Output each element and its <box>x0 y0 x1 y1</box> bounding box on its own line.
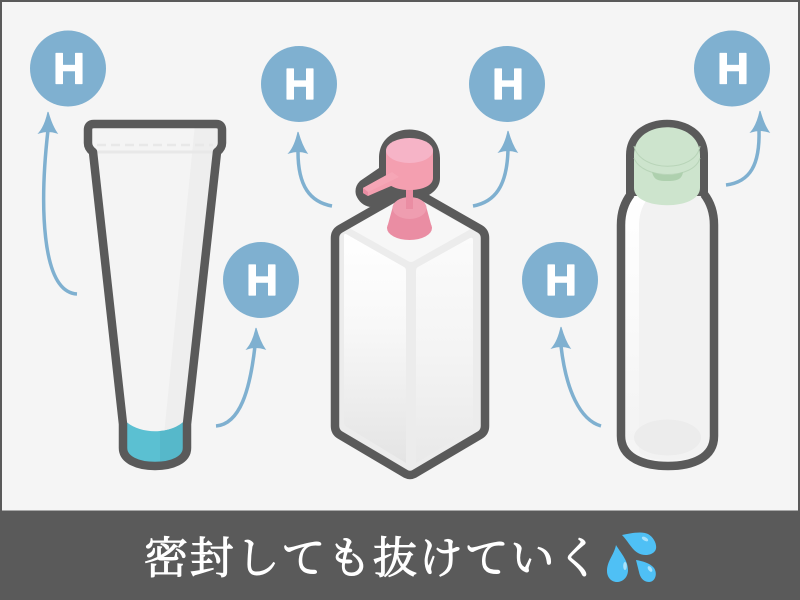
illustration: toothpaste tube <box>88 124 222 466</box>
illustration: flip-cap bottle <box>621 120 714 466</box>
caption bar <box>0 510 800 600</box>
arrow: tube upper left <box>39 112 77 294</box>
hydrogen atom 1: H <box>53 44 85 94</box>
bottle body <box>621 194 714 466</box>
hydrogen atom 5 <box>522 242 598 318</box>
hydrogen atom 2 <box>223 242 299 318</box>
hydrogen atom 1 <box>30 30 106 106</box>
arrow: flip-cap bottle left <box>552 327 601 426</box>
arrow: tube lower right <box>216 328 265 426</box>
arrow: pump right <box>473 131 517 206</box>
caption text: 密封しても抜けていく <box>144 534 602 583</box>
arrow: pump left <box>289 132 332 206</box>
pump head <box>363 138 433 196</box>
hydrogen atom 5: H <box>545 256 577 305</box>
hydrogen atom 6: H <box>717 44 749 94</box>
pump base <box>387 187 432 240</box>
pump head outline <box>356 130 440 207</box>
right face <box>416 238 473 463</box>
hydrogen atom 4: H <box>492 60 524 109</box>
hydrogen atom 3: H <box>284 60 316 109</box>
top face <box>350 195 470 262</box>
icon: sweat droplets <box>607 532 656 582</box>
tube cap <box>122 417 188 466</box>
illustration: pump bottle <box>335 130 485 475</box>
hydrogen atom 4 <box>469 46 545 122</box>
left face <box>344 234 406 463</box>
hydrogen atom 6 <box>694 30 770 106</box>
hydrogen atom 2: H <box>246 256 278 305</box>
bottle body <box>335 189 485 475</box>
cap <box>626 120 708 205</box>
hydrogen atom 3 <box>261 46 337 122</box>
arrow: flip-cap bottle right <box>726 111 769 185</box>
